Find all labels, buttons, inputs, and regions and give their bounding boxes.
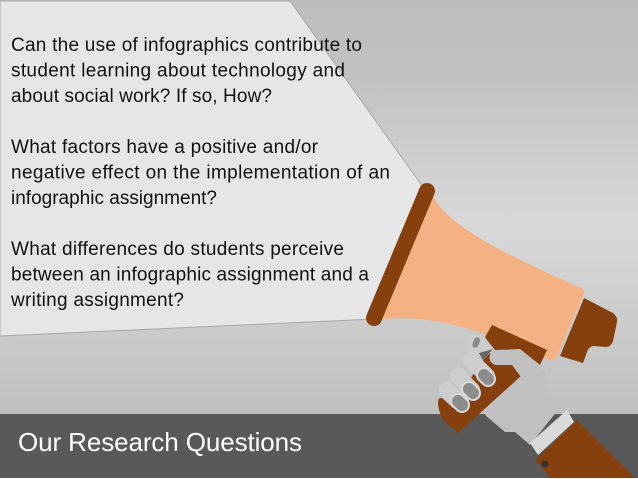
question text: infographic assignment? xyxy=(11,188,217,209)
handle top block xyxy=(485,325,547,365)
megaphone handle xyxy=(438,353,521,433)
middle finger xyxy=(458,376,472,390)
sleeve xyxy=(535,420,635,478)
question text: student learning about technology and xyxy=(11,60,345,82)
index finger xyxy=(471,360,487,376)
hand palm and wrist xyxy=(485,349,558,445)
megaphone cone xyxy=(381,195,584,360)
icon: megaphone in hand xyxy=(374,191,635,478)
footer bar xyxy=(0,414,638,478)
question text: about social work? If so, How? xyxy=(11,86,272,107)
fingers xyxy=(447,360,488,405)
trigger xyxy=(479,349,493,360)
question text: between an infographic assignment and a xyxy=(11,264,369,286)
question text xyxy=(10,35,390,311)
question text: negative effect on the implementation of an xyxy=(11,162,390,184)
shirt cuff xyxy=(530,410,574,455)
trigger nail xyxy=(471,336,481,349)
question text: writing assignment? xyxy=(10,290,184,311)
sleeve button xyxy=(542,460,548,468)
light beam panel xyxy=(0,1,423,336)
fingernail middle xyxy=(469,389,473,393)
question text: What differences do students perceive xyxy=(11,239,344,260)
footer title: Our Research Questions xyxy=(18,427,302,457)
megaphone rim xyxy=(374,191,427,318)
question text: What factors have a positive and/or xyxy=(11,137,319,158)
megaphone back cap xyxy=(560,298,617,363)
ring finger xyxy=(447,390,461,402)
question text: Can the use of infographics contribute to xyxy=(11,35,362,56)
fingernail ring xyxy=(458,401,462,405)
fingernail index xyxy=(484,375,488,379)
trigger finger xyxy=(467,336,493,358)
